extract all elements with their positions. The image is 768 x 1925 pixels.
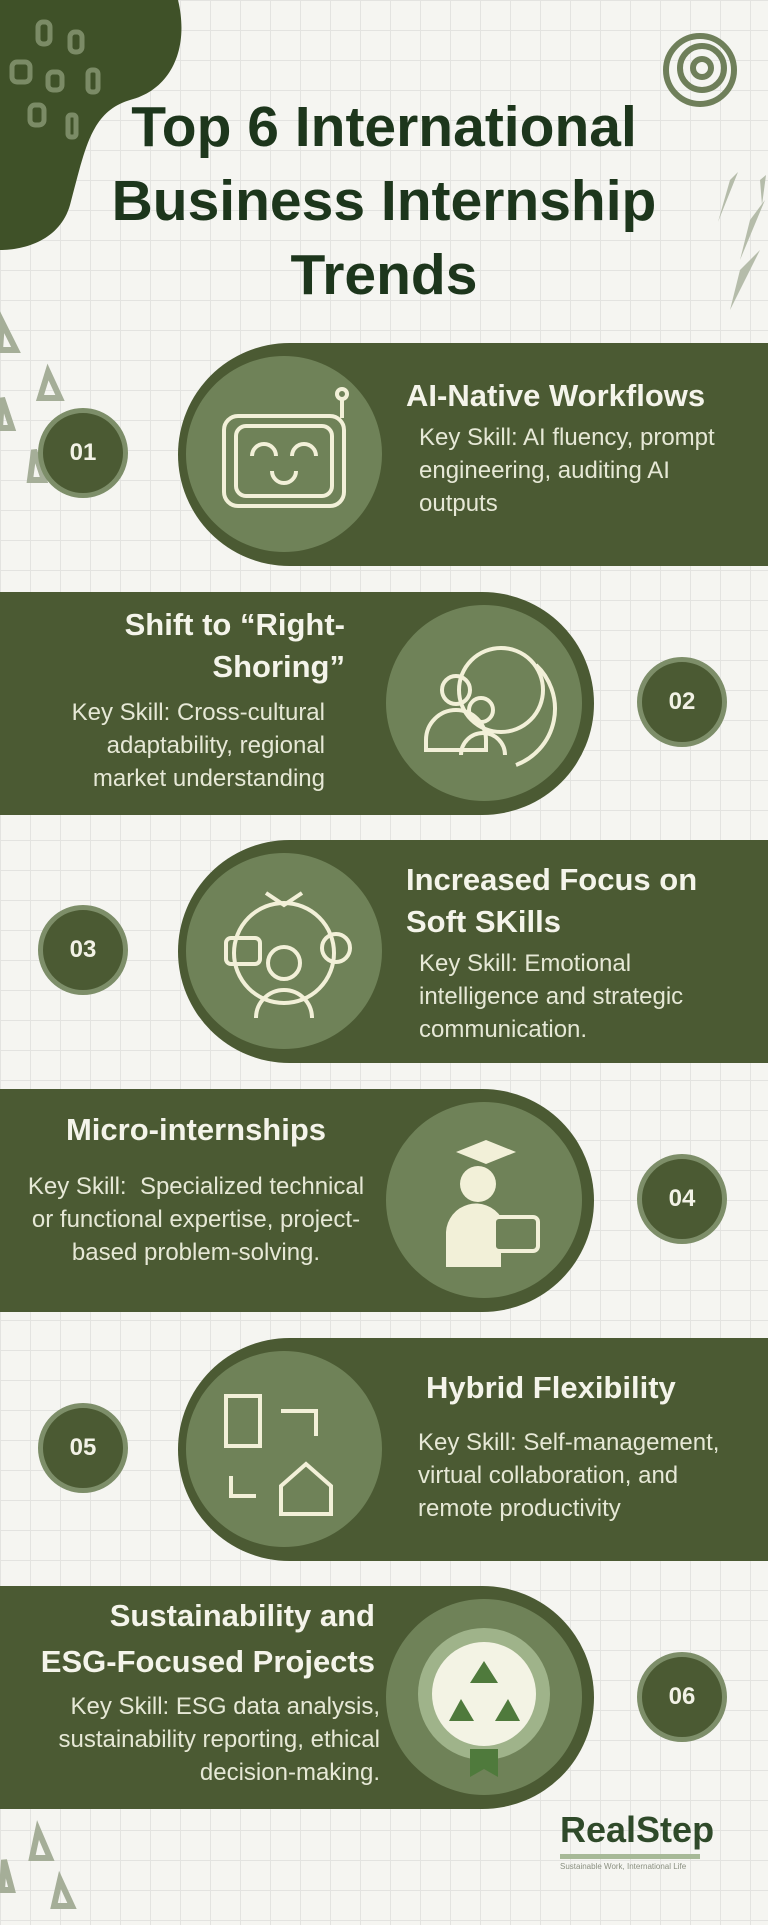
text 2: Shift to “Right-: [125, 607, 345, 642]
text: or functional expertise, project-: [32, 1206, 360, 1233]
text: market understanding: [93, 765, 325, 792]
decoration: left triangles: [0, 312, 65, 483]
icon: hybrid: [186, 1351, 382, 1547]
badge 04: 04: [669, 1185, 695, 1212]
logo: Sustainable Work, International Life: [560, 1862, 686, 1871]
text 6: Sustainability and: [110, 1598, 375, 1633]
text: adaptability, regional: [107, 732, 325, 759]
logo: RealStep: [560, 1809, 714, 1850]
decoration: spiral: [663, 33, 737, 107]
badge 03: [38, 905, 128, 995]
badge 02: [637, 657, 727, 747]
logo: [560, 1809, 714, 1871]
title: Business Internship: [112, 169, 656, 233]
text 4: Micro-internships: [66, 1112, 326, 1147]
title: Trends: [291, 243, 477, 307]
panel 6: [0, 1586, 594, 1809]
text 3: Soft SKills: [406, 904, 561, 939]
text: virtual collaboration, and: [418, 1462, 678, 1489]
badge 01: 01: [70, 439, 96, 466]
text 5: Hybrid Flexibility: [426, 1370, 676, 1405]
text: remote productivity: [418, 1495, 621, 1522]
text 3: Increased Focus on: [406, 862, 697, 897]
badge 04: [637, 1154, 727, 1244]
icon: graduate: [386, 1102, 582, 1298]
text 2: Shoring”: [212, 649, 345, 684]
icon: recycle badge: [386, 1599, 582, 1795]
badge 06: [637, 1652, 727, 1742]
badge 05: [38, 1403, 128, 1493]
text: Key Skill: Emotional: [419, 950, 631, 977]
decoration: top-left blob: [0, 0, 182, 250]
badge 02: 02: [669, 688, 695, 715]
text 3: [406, 862, 697, 939]
text 1: AI-Native Workflows: [406, 378, 705, 413]
badge 03: 03: [70, 936, 96, 963]
text: sustainability reporting, ethical: [58, 1726, 380, 1753]
title: [112, 95, 656, 307]
decoration: bottom triangles: [0, 1820, 77, 1909]
text: engineering, auditing AI: [419, 457, 670, 484]
text: Key Skill: Self-management,: [418, 1429, 719, 1456]
badge 05: 05: [70, 1434, 96, 1461]
text: decision-making.: [200, 1759, 380, 1786]
text 6: ESG-Focused Projects: [41, 1644, 375, 1679]
text 6: [41, 1598, 375, 1679]
text: outputs: [419, 490, 498, 517]
panel 2: [0, 592, 594, 815]
panel 3: [178, 840, 768, 1063]
text: Key Skill: ESG data analysis,: [71, 1693, 380, 1720]
title: Top 6 International: [131, 95, 637, 159]
text: Key Skill: Specialized technical: [28, 1173, 364, 1200]
icon: soft skills: [186, 853, 382, 1049]
text: Key Skill: Cross-cultural: [72, 699, 325, 726]
text: communication.: [419, 1016, 587, 1043]
text 2: [125, 607, 345, 684]
badge 01: [38, 408, 128, 498]
panel 1: [178, 343, 768, 566]
text: based problem-solving.: [72, 1239, 320, 1266]
decoration: right strokes: [718, 172, 766, 310]
badge 06: 06: [669, 1683, 695, 1710]
icon: globe people: [386, 605, 582, 801]
text: Key Skill: AI fluency, prompt: [419, 424, 715, 451]
text: intelligence and strategic: [419, 983, 683, 1010]
panel 4: [0, 1089, 594, 1312]
icon: robot: [186, 356, 382, 552]
panel 5: [178, 1338, 768, 1561]
